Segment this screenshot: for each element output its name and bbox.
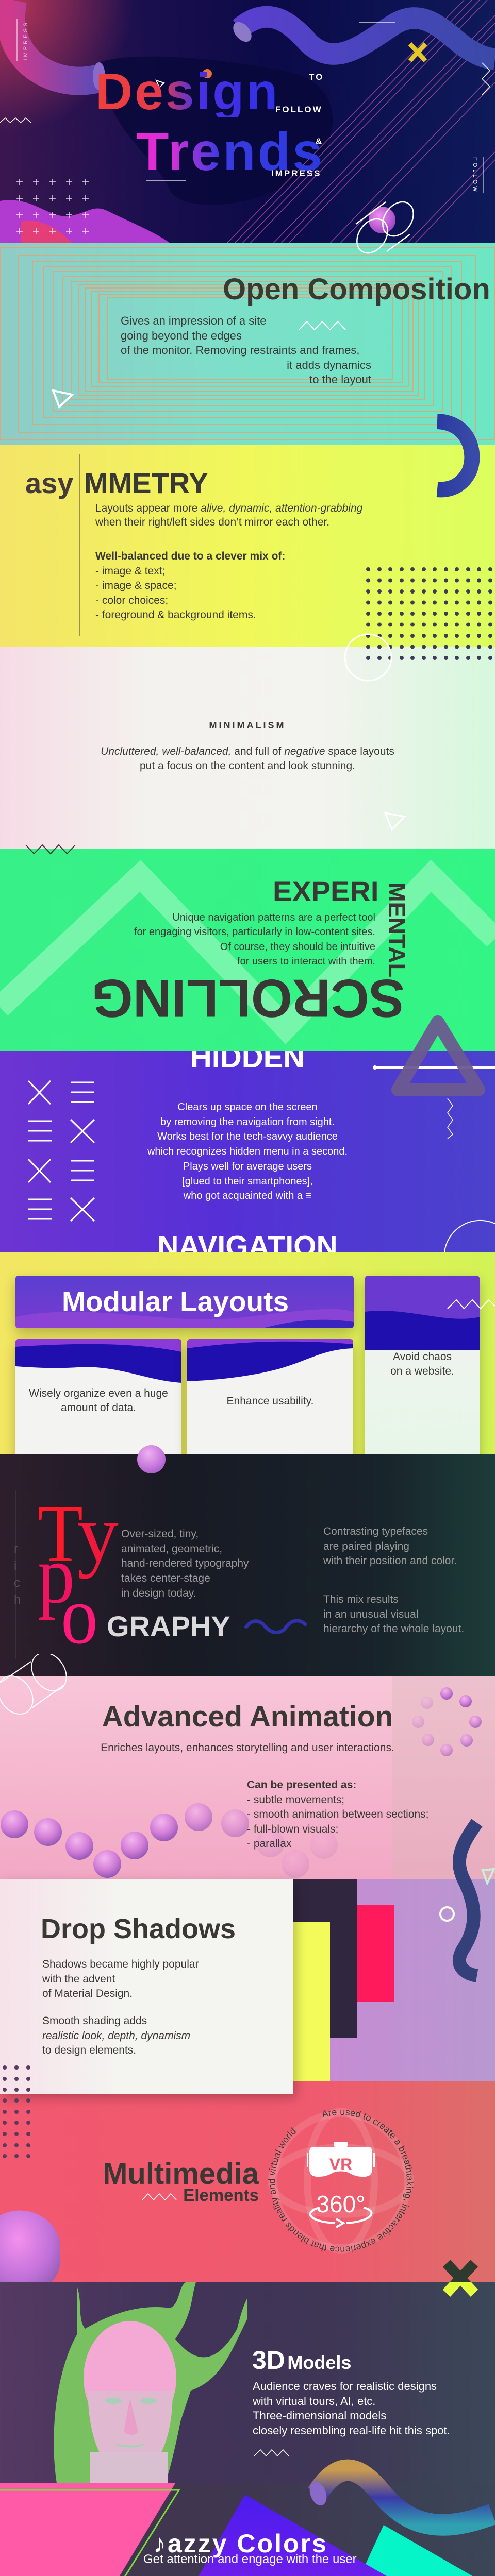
text: for users to interact with them.	[237, 956, 375, 967]
section: 3d models	[0, 2282, 495, 2483]
text: who got acquainted with a ≡	[184, 1190, 311, 1201]
text	[42, 1958, 199, 1999]
heading: asy MMETRY: asy	[25, 467, 73, 499]
section: drop shadows	[0, 1879, 495, 2081]
text: by removing the navigation from sight.	[160, 1116, 335, 1128]
heading: ♪azzy Colors	[153, 2529, 328, 2558]
section: minimalism	[0, 647, 495, 849]
list: - subtle movements;	[247, 1794, 344, 1805]
rich vertical letters: r	[14, 1542, 18, 1556]
card: header modular	[15, 1276, 354, 1328]
text: Layouts appear more alive, dynamic, attention-grabbing	[95, 502, 362, 514]
text left: animated, geometric,	[121, 1543, 222, 1555]
section: advanced animation	[0, 1676, 495, 1879]
card: header modular: Modular Layouts	[62, 1285, 289, 1317]
list: - color choices;	[95, 595, 168, 606]
big x	[447, 2263, 474, 2293]
section: typography: hierarchy of the whole layout.	[323, 1623, 464, 1635]
text right: are paired playing	[323, 1540, 409, 1552]
subtitle: Get attention and engage with the user	[143, 2552, 357, 2566]
card 3	[365, 1276, 480, 1466]
heading: Open Composition	[223, 273, 490, 306]
section: header: IMPRESS	[271, 168, 322, 178]
panel: drop shadows white: realistic look, depth, dynamism	[42, 2030, 190, 2041]
text: when their right/left sides don’t mirror each other.	[95, 516, 329, 528]
text: with virtual tours, AI, etc.	[253, 2395, 375, 2408]
list: - smooth animation between sections;	[247, 1808, 429, 1820]
heading: 3D Models	[252, 2346, 351, 2375]
section: hidden navigation	[0, 1051, 495, 1252]
section: modular layouts	[0, 1252, 495, 1454]
text: Uncluttered, well-balanced, and full of negative space layouts	[101, 745, 394, 757]
section: typography: This mix results	[323, 1594, 399, 1605]
text: Works best for the tech-savvy audience	[157, 1131, 338, 1142]
section: typography: in an unusual visual	[323, 1608, 418, 1620]
section: multimedia: Elements	[183, 2185, 259, 2205]
card 2	[187, 1339, 353, 1466]
section: asymmetry	[0, 445, 495, 647]
section: multimedia: VR	[329, 2155, 352, 2174]
tube jazzy	[317, 2470, 492, 2525]
text: Plays well for average users	[183, 1161, 312, 1172]
list: - parallax	[247, 1838, 291, 1850]
section: typography: y	[77, 1487, 119, 1579]
text: going beyond the edges	[121, 329, 242, 342]
list: - image & text;	[95, 565, 165, 577]
text: for engaging visitors, particularly in low-content sites.	[134, 926, 375, 938]
arc tube asymmetry	[437, 421, 472, 489]
rich vertical letters	[14, 1542, 21, 1607]
text	[147, 1101, 348, 1201]
text left: hand-rendered typography	[121, 1557, 249, 1569]
list: - full-blown visuals;	[247, 1823, 338, 1835]
minimalism zigzag	[26, 845, 75, 854]
card 2: Enhance usability.	[227, 1395, 314, 1407]
list	[95, 550, 285, 621]
card 1: amount of data.	[61, 1402, 136, 1414]
text left: takes center-stage	[121, 1572, 210, 1584]
section: experimental scrolling	[0, 849, 495, 1051]
list	[247, 1779, 429, 1850]
text: to the layout	[309, 373, 371, 386]
text: which recognizes hidden menu in a second.	[147, 1146, 348, 1157]
text	[95, 502, 363, 528]
dots grid	[366, 567, 492, 660]
heading: Advanced Animation	[102, 1700, 393, 1733]
dots below panel	[3, 2098, 30, 2158]
section: typography: T	[38, 1487, 83, 1579]
text: [glued to their smartphones],	[182, 1176, 313, 1187]
graphy: GRAPHY	[107, 1610, 230, 1642]
panel: drop shadows white: Smooth shading adds	[42, 2015, 147, 2027]
list: Can be presented as:	[247, 1779, 356, 1791]
text	[101, 745, 394, 772]
title: Design: Design	[95, 63, 279, 121]
title: Trends: Trends	[136, 122, 324, 182]
section: header	[0, 0, 495, 243]
cylinder with sphere	[351, 196, 420, 259]
triangle open comp	[53, 391, 72, 407]
text	[121, 314, 371, 386]
section: multimedia: Are used to create a breathtaking, interactive experience that blends reality and virtual world	[268, 2110, 414, 2252]
text left: in design today.	[121, 1587, 196, 1599]
rich vertical letters: i	[14, 1559, 16, 1573]
zigzag open comp	[299, 321, 345, 330]
vertical word: impress: IMPRESS	[23, 21, 29, 61]
rich vertical letters: c	[14, 1576, 20, 1590]
section: multimedia: 360°	[316, 2191, 366, 2217]
heading: experi: EXPERI	[273, 875, 378, 907]
section: typography: o	[61, 1569, 98, 1661]
section: open composition	[0, 243, 495, 445]
text left	[121, 1528, 249, 1599]
text: Three-dimensional models	[253, 2409, 386, 2422]
text: of Material Design.	[42, 1988, 133, 1999]
text: Unique navigation patterns are a perfect tool	[172, 912, 375, 923]
text right: Contrasting typefaces	[323, 1526, 428, 1537]
text right: with their position and color.	[323, 1555, 457, 1567]
cylinder outline	[0, 1654, 67, 1715]
wavy tube drop shadows	[459, 1823, 477, 1976]
text: Shadows became highly popular	[42, 1958, 199, 1970]
list: - foreground & background items.	[95, 609, 256, 621]
text: Clears up space on the screen	[177, 1101, 318, 1113]
list: - image & space;	[95, 580, 177, 591]
card 1: Wisely organize even a huge	[29, 1387, 168, 1399]
text: Of course, they should be intuitive	[220, 941, 375, 953]
heading: mental vertical: MENTAL	[384, 883, 410, 977]
heading: MINIMALISM	[209, 720, 286, 731]
card 1	[15, 1339, 182, 1466]
panel: drop shadows white	[0, 1879, 293, 2094]
text right	[323, 1526, 457, 1567]
heading: Drop Shadows	[41, 1913, 236, 1944]
section: asymmetry: MMETRY	[84, 467, 208, 499]
text	[253, 2380, 450, 2437]
text: Audience craves for realistic designs	[253, 2380, 437, 2393]
list: Well-balanced due to a clever mix of:	[95, 550, 285, 562]
subtitle: Enriches layouts, enhances storytelling and user interactions.	[101, 1742, 394, 1754]
rich vertical letters: h	[14, 1593, 21, 1607]
text: closely resembling real-life hit this spot.	[253, 2424, 450, 2437]
text: with the advent	[42, 1973, 115, 1985]
triangle tube	[391, 1015, 485, 1096]
text left: Over-sized, tiny,	[121, 1528, 199, 1540]
text	[134, 912, 375, 967]
section: jazzy colors	[0, 2483, 495, 2576]
text: it adds dynamics	[287, 359, 371, 371]
modular zigzag	[448, 1300, 495, 1309]
heading: Multimedia	[103, 2157, 259, 2191]
section: header: &	[316, 137, 322, 146]
text: Gives an impression of a site	[121, 314, 266, 327]
vertical word: follow: FOLLOW	[472, 157, 478, 193]
text: of the monitor. Removing restraints and frames,	[121, 344, 359, 357]
scrolling upside-down: SCROLLING	[92, 968, 404, 1028]
sphere on card	[137, 1445, 166, 1473]
section: header: FOLLOW	[275, 105, 323, 114]
section: typography: p	[38, 1529, 75, 1620]
small words: TO	[309, 72, 324, 82]
section: typography	[0, 1454, 495, 1676]
card 3: Avoid chaos	[393, 1351, 452, 1363]
card 3: on a website.	[390, 1365, 454, 1377]
section: multimedia	[0, 2081, 495, 2282]
text: put a focus on the content and look stunning.	[140, 760, 355, 772]
panel: drop shadows white: to design elements.	[42, 2044, 136, 2056]
